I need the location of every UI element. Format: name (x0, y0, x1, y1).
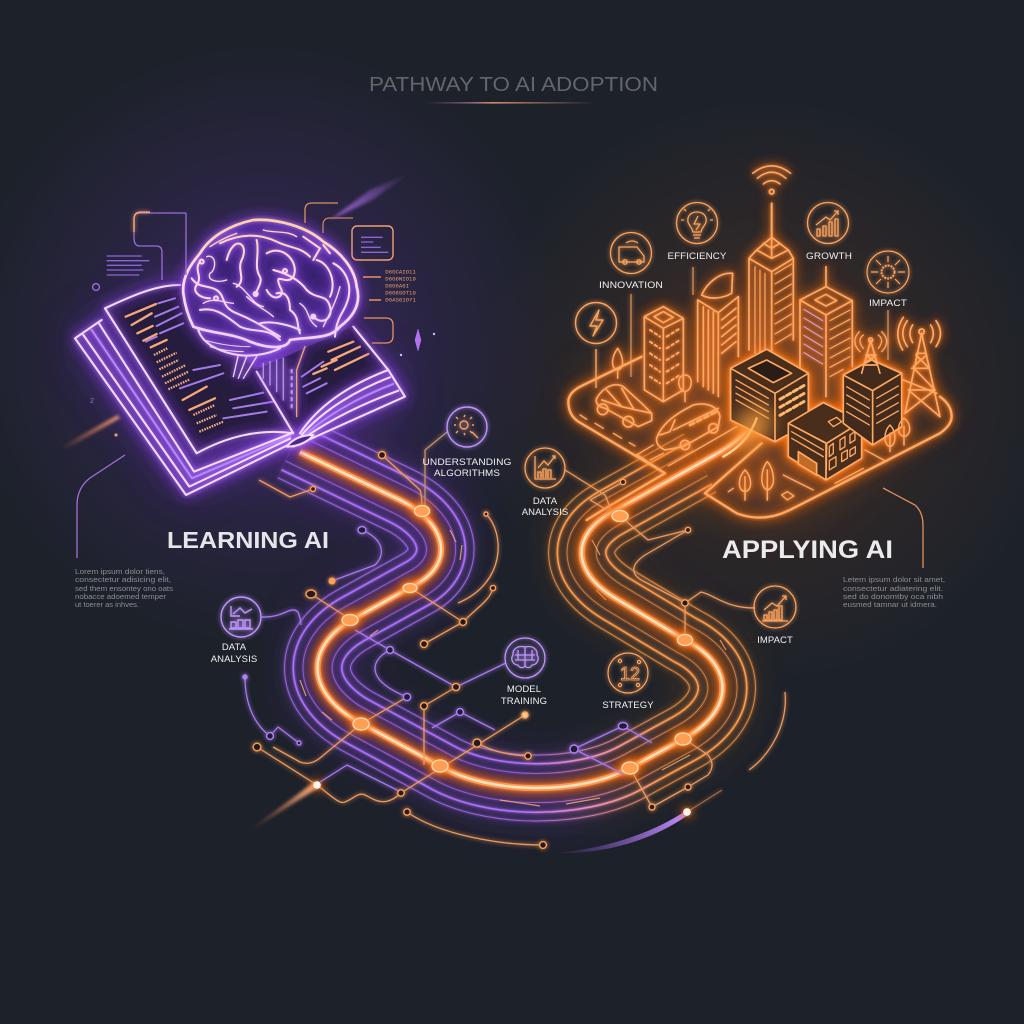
streak: purple upper (330, 173, 410, 220)
text block: applying (843, 575, 945, 609)
heading: learning ai: LEARNING AI (167, 527, 329, 553)
icon: strategy: 12 (620, 664, 640, 684)
connector: top left bracket (134, 213, 186, 280)
book glow lines (75, 285, 405, 495)
page text: code columns (154, 348, 223, 432)
ambient glows (75, 285, 950, 791)
connector: top left orange corner (134, 212, 150, 232)
van 2 (657, 404, 720, 450)
text block: learning: Lorem ipsum dolor tiens, (75, 567, 165, 576)
label: data analysis right: DATA (533, 496, 558, 507)
label: data analysis right (522, 496, 568, 518)
page text: orange rows (126, 304, 368, 410)
binary text: D6AS61O71 (385, 297, 416, 304)
label: data analysis left: DATA (222, 642, 247, 653)
text block: learning (75, 567, 173, 609)
road lane dashes (300, 530, 726, 806)
panel: pathway road (276, 428, 760, 824)
van 1 (596, 385, 652, 427)
ground bits (728, 450, 887, 500)
road dashes in city (580, 415, 737, 466)
binary text: D6G6SOT19 (385, 290, 416, 297)
connector: brain right bracket (364, 318, 393, 343)
small ring left (93, 284, 99, 290)
sparkle (415, 329, 421, 351)
road entrance glow (725, 399, 779, 457)
left page (105, 285, 293, 453)
panel: city (568, 166, 952, 520)
road exit lines (587, 443, 762, 520)
streak: purple crescent (552, 810, 688, 853)
city labels (599, 251, 907, 309)
network small nodes purple (243, 527, 628, 753)
text block: applying: sed do donomtby oca nibh (843, 592, 943, 601)
icon: strategy (608, 653, 648, 693)
road nodes (342, 506, 692, 774)
icon: impact chart (754, 586, 796, 628)
road center highlight (723, 418, 757, 457)
label: understanding algorithms: UNDERSTANDING (422, 457, 512, 468)
trees (613, 348, 910, 500)
binary text (385, 269, 416, 304)
binary text: D6G6A6I (385, 283, 409, 290)
building A (644, 307, 683, 402)
label: understanding algorithms (422, 457, 512, 479)
network lines purple (245, 432, 652, 792)
label: understanding algorithms: ALGORITHMS (434, 468, 500, 479)
heading: applying ai: APPLYING AI (722, 536, 893, 564)
label: data analysis left: ANALYSIS (211, 654, 257, 665)
streak: orange left (60, 415, 120, 450)
book body fill (75, 285, 405, 495)
panel: brain (183, 220, 358, 355)
brain fill (183, 220, 358, 355)
label: model training: TRAINING (501, 696, 547, 707)
label: model training (501, 684, 547, 707)
network small nodes orange (253, 452, 691, 848)
text block: learning: nobacce adoemed temper (75, 592, 167, 601)
text block: applying: Letem ipsum dolor sit amet, (843, 575, 945, 584)
connector: left vertical (77, 455, 125, 558)
sparkle dots (114, 333, 435, 437)
connector: right vertical (883, 488, 923, 568)
icon: lightning circle (576, 302, 616, 388)
connector: binary ticks (363, 277, 381, 300)
label: impact: IMPACT (757, 635, 793, 646)
brain glowing lines (183, 220, 358, 417)
icon: understanding algorithms (447, 407, 487, 447)
tall antenna (903, 333, 940, 417)
label digit left: 2 (90, 398, 94, 405)
binary text: D6GCAIO11 (385, 269, 416, 276)
block D (731, 349, 808, 442)
label: strategy: STRATEGY (602, 700, 654, 711)
title underline (425, 102, 595, 104)
text block: applying: eusmed tamnar ut idmera. (843, 600, 937, 609)
left connectors and widgets (77, 203, 923, 568)
road outer tracks (276, 430, 760, 824)
label: efficiency: EFFICIENCY (668, 251, 727, 262)
connector: top right second (323, 218, 353, 233)
text bars left (107, 256, 149, 275)
right page (255, 327, 388, 433)
text block: learning: ut toerer as inhves. (75, 600, 139, 609)
building F (843, 360, 902, 445)
icon: data analysis purple (221, 597, 261, 637)
platform (568, 357, 952, 518)
label: growth: GROWTH (806, 251, 852, 262)
road center glowing line (300, 415, 757, 788)
icon: efficiency bulb (676, 202, 718, 295)
network lines orange (257, 455, 785, 845)
label: data analysis right: ANALYSIS (522, 507, 568, 518)
text block: applying: consectetur adiatering elit. (843, 584, 943, 593)
building C (800, 267, 852, 397)
small antenna (862, 341, 880, 373)
icon: impact network (867, 251, 909, 360)
label: data analysis left (211, 642, 257, 665)
tower main (749, 166, 793, 360)
text block: learning: consectetur adisicing elit, (75, 575, 171, 584)
streak: orange bottom left (246, 782, 318, 833)
icon: model training (505, 638, 545, 678)
icon: innovation van (610, 232, 652, 377)
title: PATHWAY TO AI ADOPTION (369, 74, 658, 96)
text bars in box (361, 237, 388, 252)
label: model training: MODEL (507, 684, 541, 695)
panel: book (75, 237, 416, 495)
building B (698, 273, 738, 397)
binary text: D6G6NIO19 (385, 276, 416, 283)
block E (788, 403, 862, 480)
label: innovation: INNOVATION (599, 280, 663, 291)
icon: data analysis orange (525, 448, 565, 488)
icon: document box (352, 226, 393, 260)
page text: purple rows (146, 298, 327, 418)
label: impact: IMPACT (869, 298, 907, 309)
icon: growth chart (808, 202, 848, 244)
text block: learning: sed them ensontey ono oats (75, 584, 173, 593)
bright nodes (313, 781, 691, 816)
connector: top right (305, 203, 338, 223)
